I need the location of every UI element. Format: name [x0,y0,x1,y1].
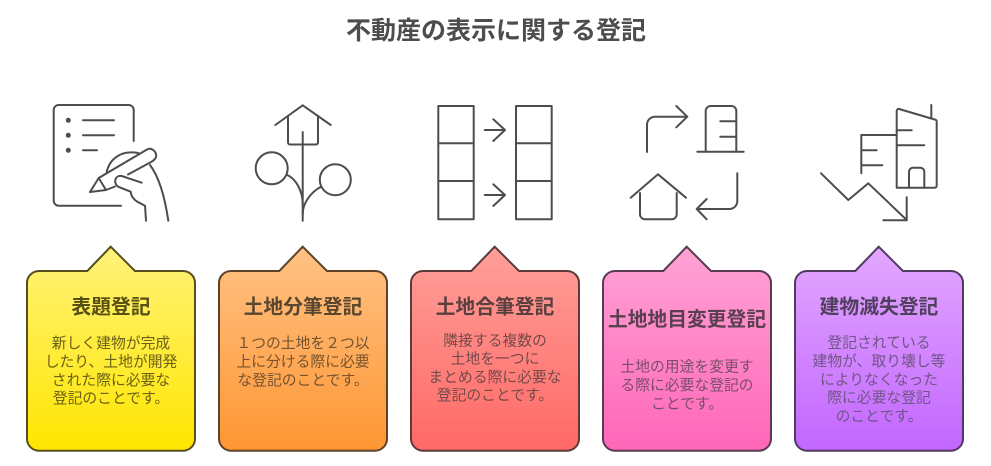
icon: building with declining arrow [821,105,937,220]
icon: house and building exchange cycle [631,106,744,219]
text: 表題登記 description: したり、土地が開発 [45,354,177,370]
panel: 土地分筆登記 [219,247,387,451]
text: 土地合筆登記 description: 隣接する複数の [443,332,547,350]
text: 表題登記 description: された際に必要な [52,372,170,389]
icon: two columns of parcels with arrows [438,106,552,219]
text: 土地地目変更登記 description: る際に必要な登記の [620,377,754,394]
text: 土地地目変更登記 description: ことです。 [651,395,723,412]
text: 土地合筆登記 description: まとめる際に必要な [428,369,562,386]
text: 建物滅失登記 description: のことです。 [836,408,922,425]
text: 建物滅失登記 description: 登記されている [827,334,931,352]
text: 建物滅失登記 description: 建物が、取り壊し等 [813,352,946,370]
text: 土地合筆登記 description [428,332,562,404]
text: 土地合筆登記 description: 登記のことです。 [437,387,553,404]
panel: 土地地目変更登記 [603,247,771,451]
text: 土地地目変更登記 description [620,358,754,412]
icon: document and writing hand [54,105,168,221]
panel: 土地合筆登記 [411,247,579,451]
icon: house on branching stem with two circles [256,105,351,221]
heading: 建物滅失登記: 建物滅失登記 [820,296,939,318]
text: 建物滅失登記 description: 際に必要な登記 [827,390,931,407]
text: 土地分筆登記 description [236,335,370,389]
heading: 土地合筆登記: 土地合筆登記 [436,296,555,318]
text: 土地合筆登記 description: 土地を一つに [451,351,539,368]
text: 表題登記 description: 新しく建物が完成 [52,335,170,352]
text: 建物滅失登記 description [813,334,946,425]
title: 不動産の表示に関する登記 [346,17,646,45]
heading: 土地分筆登記: 土地分筆登記 [244,296,363,318]
panel: 建物滅失登記 [795,247,963,451]
text: 表題登記 description: 登記のことです。 [53,390,169,407]
heading: 土地地目変更登記: 土地地目変更登記 [608,309,766,331]
text: 土地地目変更登記 description: 土地の用途を変更す [620,358,754,376]
text: 土地分筆登記 description: な登記のことです。 [237,372,369,389]
text: 建物滅失登記 description: によりなくなった [820,371,938,388]
text: 表題登記 description [45,335,177,407]
panel: 表題登記 [27,247,195,451]
heading: 表題登記: 表題登記 [71,296,151,318]
text: 土地分筆登記 description: １つの土地を２つ以 [236,335,370,352]
text: 土地分筆登記 description: 上に分ける際に必要 [236,354,370,370]
